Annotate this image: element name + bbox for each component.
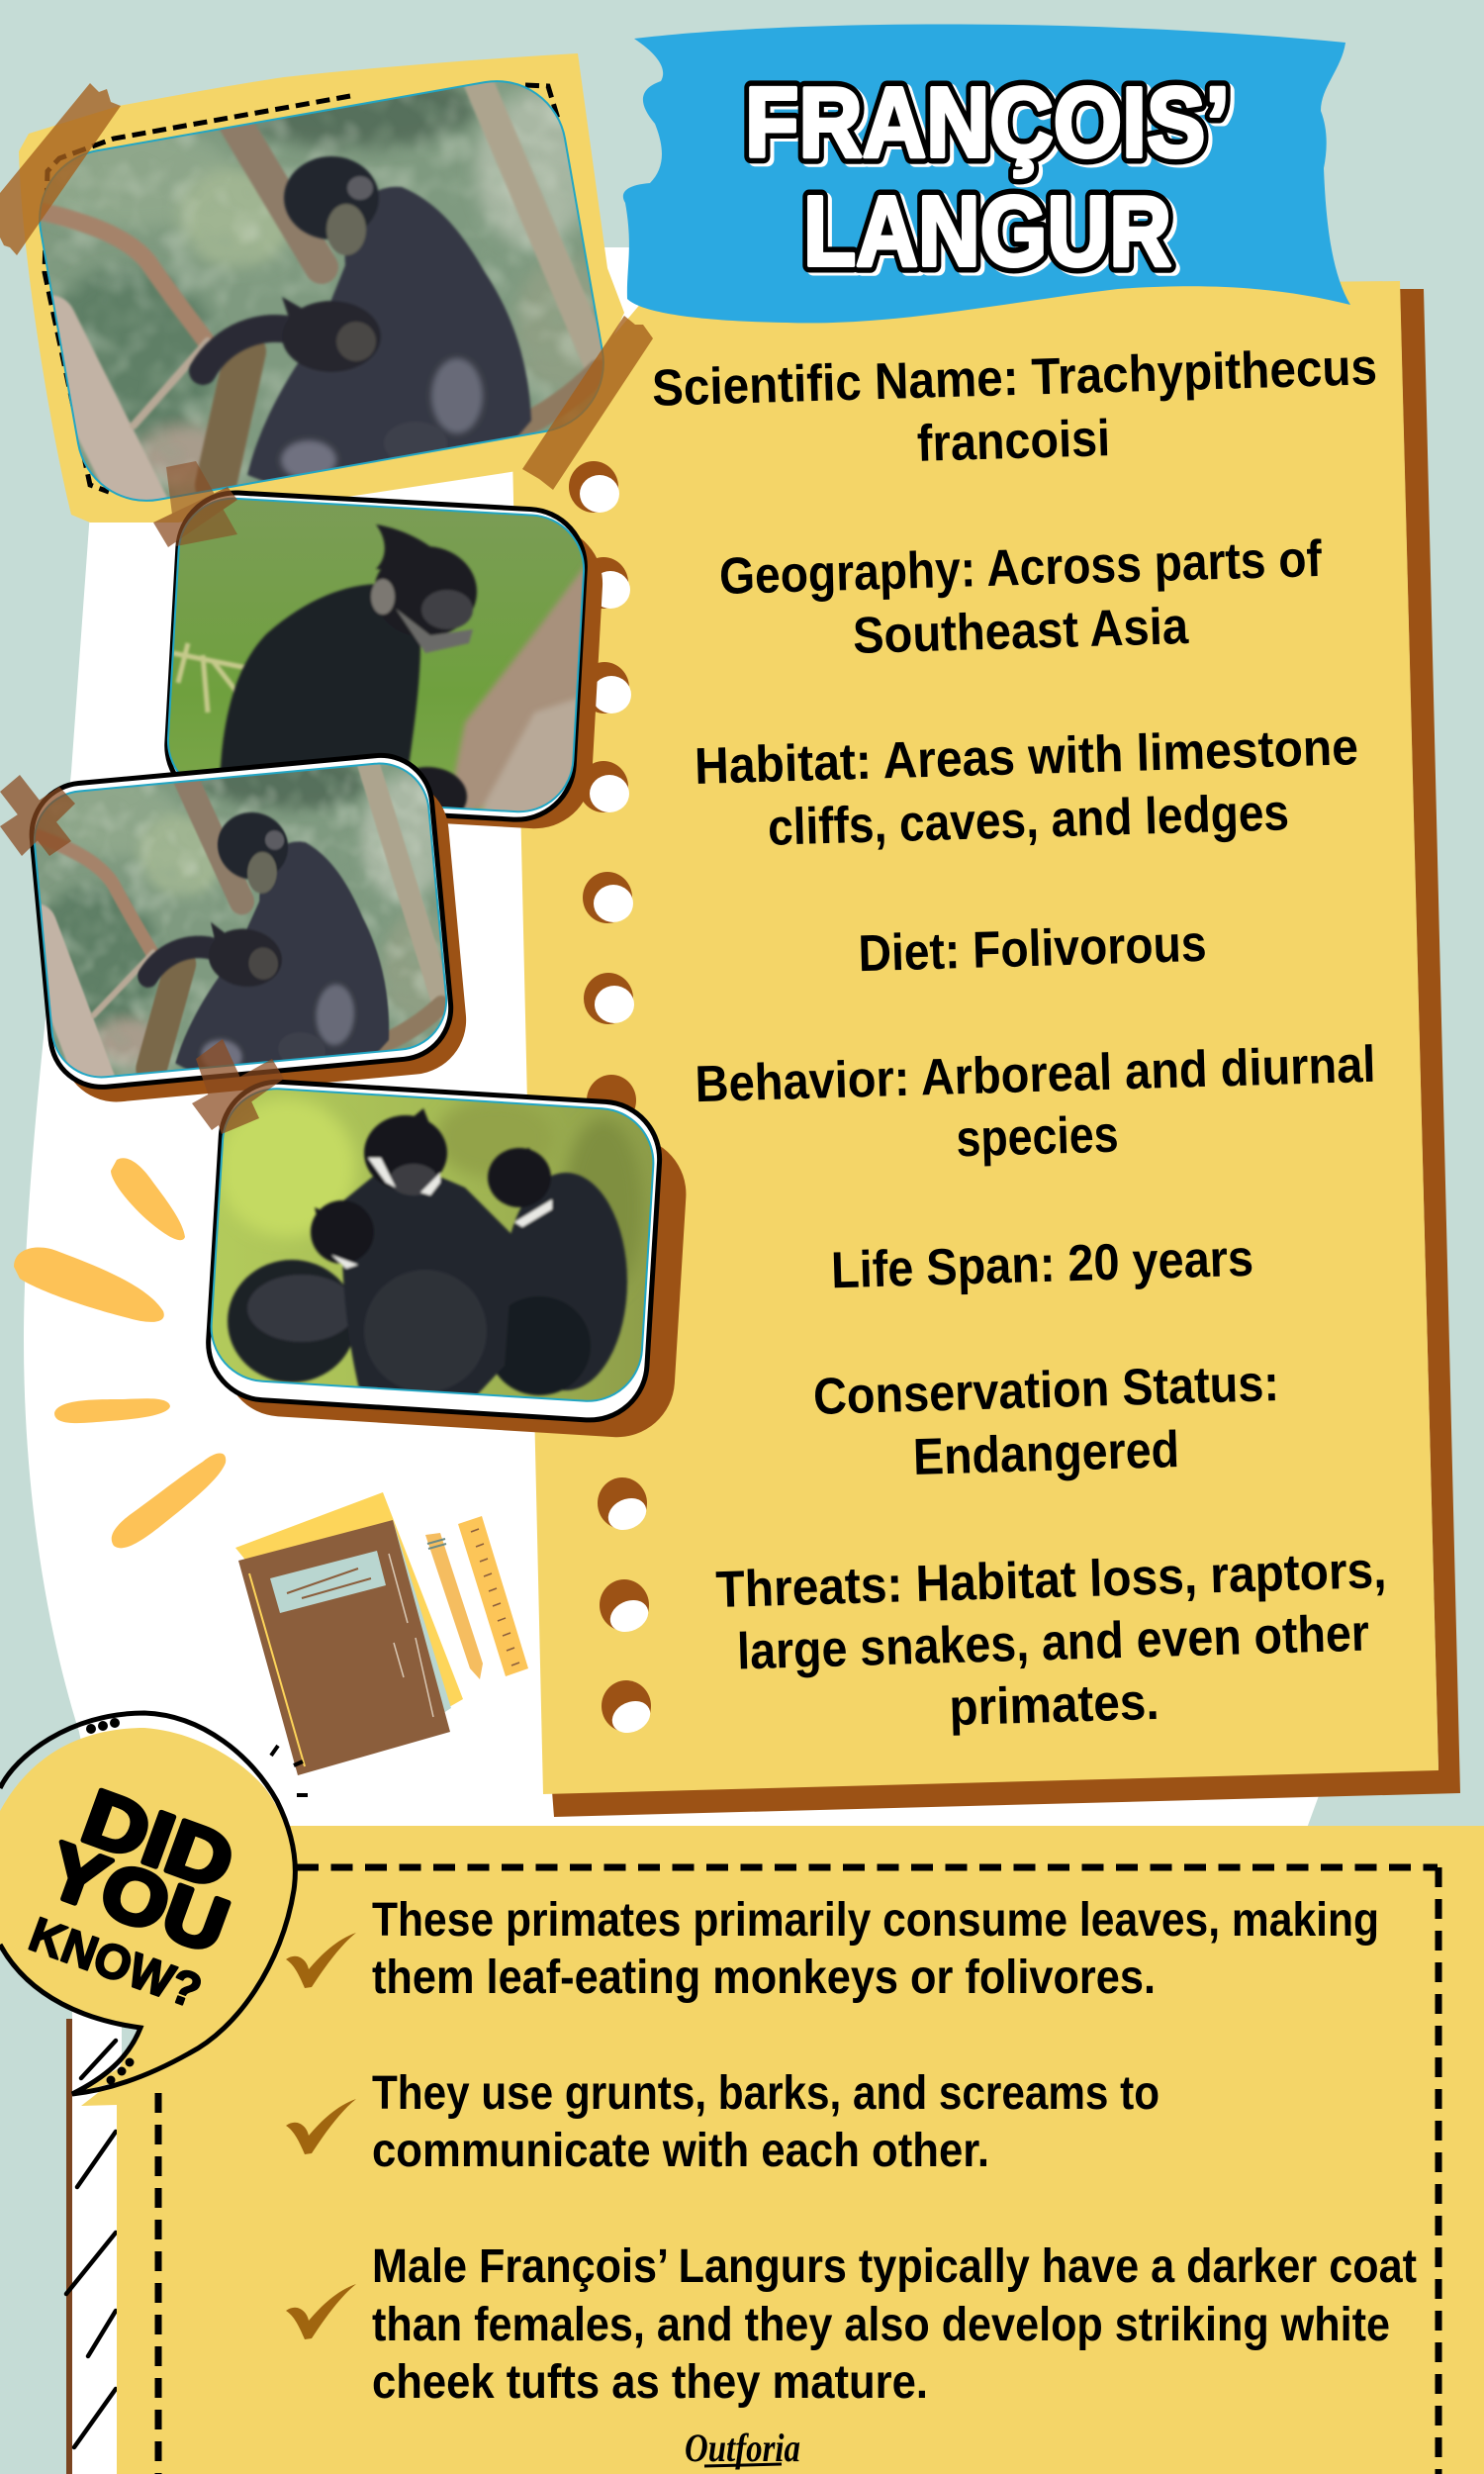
- icon: notebook, pencil and ruler: [235, 1492, 528, 1795]
- title text: [745, 67, 1234, 290]
- title text: LANGUR: [803, 176, 1171, 287]
- panel: species facts: [512, 281, 1460, 1817]
- fact: threats: large snakes, and even other: [736, 1605, 1370, 1680]
- tape: photo 3 and 4 cross: [192, 1039, 284, 1134]
- did you know heading: [23, 1772, 245, 2019]
- decorative sun rays: [14, 1158, 226, 1548]
- tape: photo 1 and 2 cross: [153, 461, 237, 547]
- fact: geography: [718, 530, 1323, 665]
- photo 3: mother langur repeated: [30, 752, 467, 1102]
- panel shadow: [552, 289, 1460, 1817]
- fact: behavior: [695, 1036, 1376, 1168]
- logo: Outforia: Outforia: [685, 2426, 800, 2470]
- fact: behavior: species: [956, 1106, 1119, 1168]
- fact: conservation status: Endangered: [912, 1421, 1180, 1486]
- speech bubble: [0, 1713, 295, 2094]
- yellow frame: [19, 53, 624, 523]
- fact: threats: Threats: Habitat loss, raptors,: [715, 1542, 1387, 1619]
- dashed outline: [45, 85, 558, 492]
- did you know heading: KNOW?: [23, 1908, 208, 2019]
- fact 3: [286, 2240, 1417, 2409]
- tape: photo 1 top-left: [0, 83, 121, 255]
- fact 2: [286, 2067, 1159, 2177]
- fact 1 text: them leaf-eating monkeys or folivores.: [372, 1951, 1156, 2004]
- photo 2 shadow: [178, 507, 605, 831]
- banner shape: [623, 24, 1350, 323]
- fact: scientific name: francoisi: [916, 410, 1111, 473]
- photo 4 shadow: [221, 1112, 690, 1441]
- fact: habitat: [694, 718, 1359, 857]
- did you know heading: YOU: [37, 1825, 239, 1970]
- fact: threats: primates.: [949, 1673, 1159, 1737]
- did you know heading: DID: [72, 1772, 245, 1906]
- photo 4 card: [205, 1079, 663, 1423]
- icon: check mark: [286, 2284, 356, 2339]
- dashed border: [158, 1867, 1438, 2474]
- fact 1: [286, 1894, 1379, 2004]
- photo 4 image: [212, 1090, 653, 1400]
- fact 2 text: [372, 2067, 1159, 2177]
- fact 3 text: than females, and they also develop striking white: [372, 2299, 1390, 2351]
- photo 2: langur on branch: [148, 485, 605, 831]
- title banner: [623, 24, 1350, 323]
- photo 2 card: [164, 490, 588, 822]
- fact 3 text: [372, 2240, 1417, 2409]
- fact: conservation status: Conservation Status:: [812, 1355, 1280, 1426]
- side strip with hatching: [66, 1979, 122, 2474]
- title text: LANGUR: [807, 179, 1175, 290]
- title text: FRANÇOIS’: [749, 70, 1234, 181]
- photo 1: mother langur with infant: [39, 80, 604, 502]
- tape strips on photos: [0, 83, 653, 1134]
- photo 1 frame: [19, 53, 624, 523]
- ruler: [458, 1516, 528, 1676]
- fact: scientific name: [651, 338, 1378, 473]
- title text: FRANÇOIS’: [745, 67, 1230, 178]
- fact 3 text: cheek tufts as they mature.: [372, 2356, 928, 2409]
- photo 3 card: [28, 751, 455, 1092]
- fact: habitat: cliffs, caves, and ledges: [767, 784, 1290, 857]
- fact 2 text: communicate with each other.: [372, 2125, 989, 2177]
- photo 2 image: [168, 499, 584, 811]
- notebook: [235, 1492, 463, 1775]
- fact 2 text: They use grunts, barks, and screams to: [372, 2067, 1159, 2120]
- photo 3 shadow: [40, 774, 471, 1106]
- tape: photo 3 top-left: [0, 775, 75, 856]
- photo 3 image: [36, 764, 445, 1077]
- fact: life span: Life Span: 20 years: [830, 1230, 1254, 1299]
- fact: habitat: Habitat: Areas with limestone: [694, 718, 1359, 796]
- fact 1 text: [372, 1894, 1379, 2004]
- photo 4: group of langurs: [198, 1079, 690, 1441]
- title text: FRANÇOIS’: [745, 67, 1230, 178]
- fact: geography: Geography: Across parts of: [718, 530, 1323, 606]
- fact: threats: [715, 1542, 1387, 1737]
- pencil: [425, 1533, 483, 1679]
- fact: scientific name: Scientific Name: Trachypithecus: [651, 338, 1378, 418]
- spark marks: [271, 1746, 308, 1795]
- icon: check mark: [286, 1933, 356, 1988]
- fact: diet: Diet: Folivorous: [858, 915, 1207, 983]
- notebook punch holes: [569, 461, 655, 1739]
- white paper sheet: [24, 247, 1328, 1831]
- panel sheet: [512, 281, 1438, 1794]
- title text: LANGUR: [803, 176, 1171, 287]
- icon: check mark: [286, 2099, 356, 2154]
- fact 1 text: These primates primarily consume leaves, making: [372, 1894, 1379, 1947]
- panel: did you know: [0, 1713, 1484, 2474]
- tape: photo 1 right: [522, 316, 653, 490]
- fact: geography: Southeast Asia: [852, 598, 1190, 665]
- fact: conservation status: [812, 1355, 1280, 1486]
- yellow panel: [81, 1826, 1484, 2474]
- fact: behavior: Behavior: Arboreal and diurnal: [695, 1036, 1376, 1113]
